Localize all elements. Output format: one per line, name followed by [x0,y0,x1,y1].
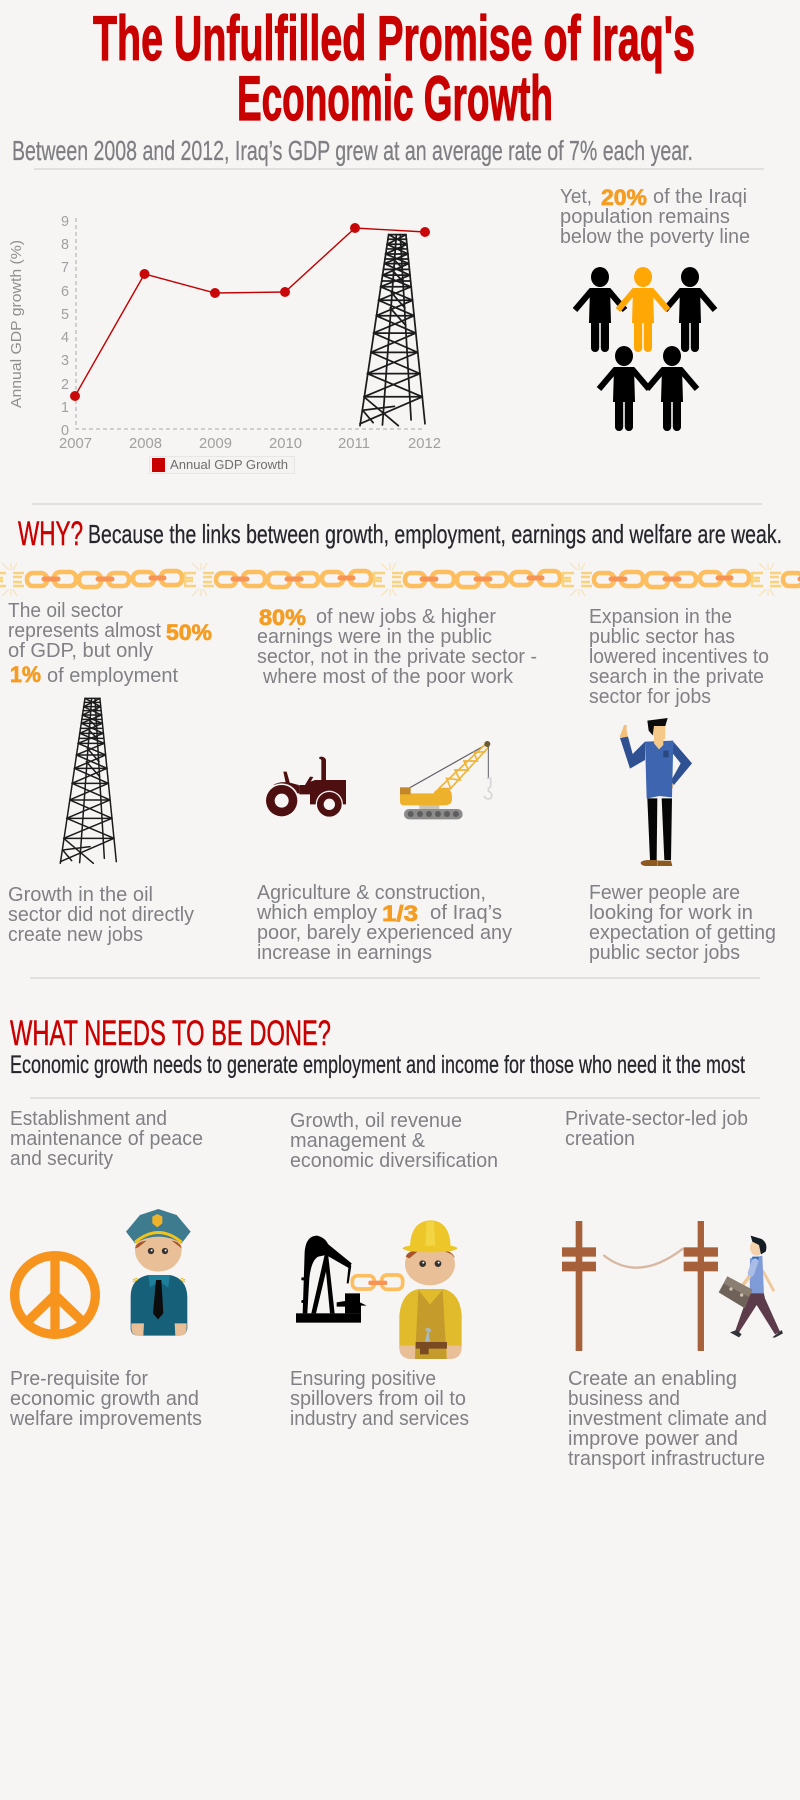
y axis labels: 1 [61,399,69,416]
icon: oil derrick [60,698,116,863]
text: growth in the oil sector: sector did not directly [8,903,195,926]
text: peace and security: maintenance of peace [10,1127,203,1150]
x axis labels: 2012 [408,435,441,452]
y axis labels: 6 [61,283,69,300]
text: peace and security: and security [10,1147,114,1170]
text: fewer people looking for work: expectation of getting [589,921,776,944]
icon: man pointing up [619,718,692,866]
text: public sector jobs [257,605,537,688]
y axis labels: 0 [61,422,69,439]
y axis labels: 3 [61,352,69,369]
text: public sector jobs: 80% [259,605,306,630]
text: poverty line: Yet, [560,185,592,208]
text: enabling climate: investment climate and [568,1407,767,1430]
text: agriculture and construction: increase in earnings [257,941,432,964]
icon: walking man with briefcase [719,1236,783,1338]
text: prerequisite: welfare improvements [9,1407,202,1430]
text: private sector job creation: Private-sector-led job [565,1107,748,1130]
text: poverty line: below the poverty line [560,225,750,248]
icon: crane [400,741,492,819]
text: fewer people looking for work: Fewer people are [589,881,740,904]
x axis labels: 2009 [199,435,232,452]
y axis labels: 5 [61,306,69,323]
y axis labels: 4 [61,329,69,346]
text: oil sector share: 1% [10,662,41,687]
heading: why: WHY? [18,515,83,553]
text: agriculture and construction [256,881,513,964]
icon: oil pump [296,1236,367,1323]
legend: Annual GDP Growth [170,457,288,472]
text: oil revenue management: management & [290,1129,425,1152]
line chart: annual GDP growth [9,213,441,474]
text: oil sector share: represents almost [8,619,161,642]
text: agriculture and construction: 1/3 [382,901,418,926]
title: Economic Growth [237,64,553,134]
text: positive spillovers: industry and services [290,1407,469,1430]
text: public sector jobs: where most of the poor work [262,665,514,688]
text: enabling climate [568,1367,767,1470]
text: poverty line: population remains [560,205,730,228]
chain divider [0,563,800,596]
text: agriculture and construction: Agriculture & construction, [257,881,486,904]
y axis labels: 7 [61,259,69,276]
x axis labels: 2010 [269,435,302,452]
x axis labels: 2011 [338,435,370,452]
text: enabling climate: transport infrastructure [568,1447,765,1470]
text: oil revenue management: economic diversification [290,1149,498,1172]
title [93,4,695,134]
icon: oil derrick in chart [360,235,425,426]
text: lowered incentives: public sector has [589,625,735,648]
y axis labels: 9 [61,213,69,230]
text: growth in the oil sector: Growth in the oil [8,883,153,906]
text: positive spillovers: Ensuring positive [290,1367,436,1390]
y axis title: Annual GDP growth (%) [9,240,25,408]
y axis labels [61,213,69,439]
text: poverty line [560,185,750,248]
icon: peace symbol [15,1255,95,1334]
icon: power poles and wire [562,1221,718,1351]
text: private sector job creation: creation [565,1127,635,1150]
text: oil revenue management [290,1109,498,1172]
text: fewer people looking for work: looking for work in [589,901,753,924]
text: public sector jobs: earnings were in the public [257,625,492,648]
text: prerequisite: economic growth and [10,1387,199,1410]
data points [70,223,430,401]
text: oil sector share [8,599,212,687]
text: enabling climate: business and [568,1387,680,1410]
icon: police officer [126,1209,191,1336]
text: oil sector share: of GDP, but only [8,639,154,662]
text: positive spillovers [290,1367,469,1430]
text: enabling climate: improve power and [568,1427,738,1450]
text: poverty line: 20% [601,185,647,210]
icon: five people, one highlighted [575,267,715,431]
text: peace and security [10,1107,203,1170]
text: growth in the oil sector [8,883,195,946]
text: oil sector share: 50% [166,620,212,645]
text: public sector jobs: sector, not in the private sector - [257,645,537,668]
x axis labels [59,435,441,452]
text: oil revenue management: Growth, oil revenue [290,1109,462,1132]
heading: what needs to be done: WHAT NEEDS TO BE DONE? [10,1014,331,1053]
y axis labels: 2 [61,376,69,393]
text: fewer people looking for work: public sector jobs [589,941,740,964]
text: public sector jobs: of new jobs & higher [316,605,496,628]
text: lowered incentives: sector for jobs [589,685,711,708]
text: agriculture and construction: of Iraq’s [430,901,502,924]
text: oil sector share: The oil sector [8,599,123,622]
text: poverty line: of the Iraqi [653,185,747,208]
text: lowered incentives: Expansion in the [589,605,732,628]
text: growth in the oil sector: create new jobs [8,923,143,946]
text: prerequisite: Pre-requisite for [10,1367,148,1390]
y axis labels: 8 [61,236,69,253]
icon: tractor [264,757,346,818]
text: prerequisite [9,1367,202,1430]
text: agriculture and construction: poor, barely experienced any [257,921,513,944]
x axis labels: 2008 [129,435,162,452]
text: lowered incentives: search in the private [589,665,764,688]
data line [75,228,425,396]
x axis labels: 2007 [59,435,92,452]
icon: chain link [352,1275,403,1289]
text: fewer people looking for work [589,881,776,964]
text: oil sector share: of employment [47,664,178,687]
text: peace and security: Establishment and [10,1107,167,1130]
icon: construction worker [399,1220,462,1359]
text: positive spillovers: spillovers from oil to [290,1387,466,1410]
text: private sector job creation [565,1107,748,1150]
text: lowered incentives: lowered incentives to [589,645,769,668]
text: agriculture and construction: which employ [256,901,378,924]
text: lowered incentives [589,605,769,708]
text: enabling climate: Create an enabling [568,1367,737,1390]
